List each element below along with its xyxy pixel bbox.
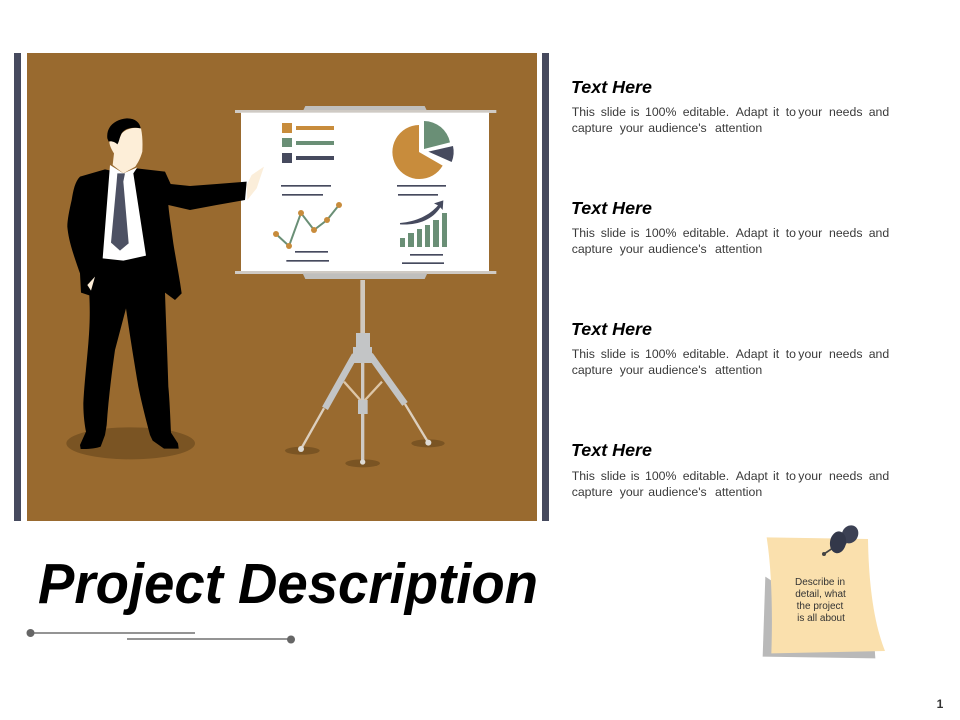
text block 1: and: [869, 105, 889, 119]
text block 3: 100%: [645, 347, 677, 361]
bar chart with rising arrow: [400, 200, 447, 264]
text block 2: and: [869, 226, 889, 240]
text block 2: 100%: [645, 226, 677, 240]
text block 2: editable.: [683, 226, 729, 240]
text block 2: Text Here: [571, 198, 652, 218]
text block 3: editable.: [683, 347, 729, 361]
text block 2: your: [620, 242, 644, 256]
text block 1: 100%: [645, 105, 677, 119]
text block 4: 100%: [645, 469, 677, 483]
text block 3: [571, 319, 889, 377]
text block 4: audience's: [648, 485, 707, 499]
text block 2: This: [572, 226, 595, 240]
text block 3: attention: [715, 363, 762, 377]
left accent bar: [14, 53, 21, 521]
text block 2: is: [631, 226, 640, 240]
note text: [795, 577, 846, 624]
text block 3: your: [798, 347, 822, 361]
text block 3: and: [869, 347, 889, 361]
text block 2: audience's: [648, 242, 707, 256]
text block 4: your: [798, 469, 822, 483]
text block 4: Adapt: [736, 469, 768, 483]
text block 2: [571, 198, 889, 256]
page number: 1: [937, 697, 944, 711]
text block 2: your: [798, 226, 822, 240]
text block 2: capture: [572, 242, 613, 256]
whiteboard with charts: [235, 106, 496, 279]
icon: push pin: [822, 522, 862, 556]
text block 2: it: [773, 226, 780, 240]
text block 2: to: [786, 226, 796, 240]
line chart: [273, 202, 342, 262]
text block 1: your: [620, 121, 644, 135]
text block 1: needs: [829, 105, 863, 119]
note text: the project: [797, 601, 844, 612]
text block 3: it: [773, 347, 780, 361]
text block 3: needs: [829, 347, 863, 361]
text block 3: audience's: [648, 363, 707, 377]
text block 4: your: [620, 485, 644, 499]
text block 3: to: [786, 347, 796, 361]
text block 3: Adapt: [736, 347, 768, 361]
text block 1: is: [631, 105, 640, 119]
text block 4: editable.: [683, 469, 729, 483]
text block 1: capture: [572, 121, 613, 135]
text block 2: slide: [601, 226, 626, 240]
text block 4: needs: [829, 469, 863, 483]
note text: is all about: [797, 613, 845, 624]
text block 2: needs: [829, 226, 863, 240]
text block 3: capture: [572, 363, 613, 377]
text block 1: audience's: [648, 121, 707, 135]
figure: businessman presenting: [66, 118, 264, 459]
panel: brown presentation scene: [14, 53, 549, 521]
text block 4: and: [869, 469, 889, 483]
text block 1: to: [786, 105, 796, 119]
chart legend: [281, 123, 334, 196]
text block 1: slide: [601, 105, 626, 119]
text block 3: slide: [601, 347, 626, 361]
text block 1: it: [773, 105, 780, 119]
text block 1: [571, 77, 889, 135]
text block 3: Text Here: [571, 319, 652, 339]
text block 1: attention: [715, 121, 762, 135]
text block 3: your: [620, 363, 644, 377]
text block 1: Adapt: [736, 105, 768, 119]
text block 1: editable.: [683, 105, 729, 119]
text block 3: This: [572, 347, 595, 361]
sticky note: [763, 522, 885, 658]
text block 4: is: [631, 469, 640, 483]
text block 4: capture: [572, 485, 613, 499]
text block 4: slide: [601, 469, 626, 483]
right accent bar: [542, 53, 549, 521]
text block 2: Adapt: [736, 226, 768, 240]
note text: Describe in: [795, 577, 845, 588]
text block 1: This: [572, 105, 595, 119]
note text: detail, what: [795, 589, 846, 600]
title: Project Description: [38, 552, 538, 616]
title underline connectors: [26, 629, 295, 644]
text block 4: to: [786, 469, 796, 483]
text block 4: it: [773, 469, 780, 483]
text block 1: Text Here: [571, 77, 652, 97]
tripod stand: [285, 280, 445, 467]
text block 4: attention: [715, 485, 762, 499]
text block 4: Text Here: [571, 440, 652, 460]
text block 1: your: [798, 105, 822, 119]
text block 4: This: [572, 469, 595, 483]
pie chart: [392, 121, 454, 196]
text block 4: [571, 440, 889, 499]
text block 3: is: [631, 347, 640, 361]
text block 2: attention: [715, 242, 762, 256]
